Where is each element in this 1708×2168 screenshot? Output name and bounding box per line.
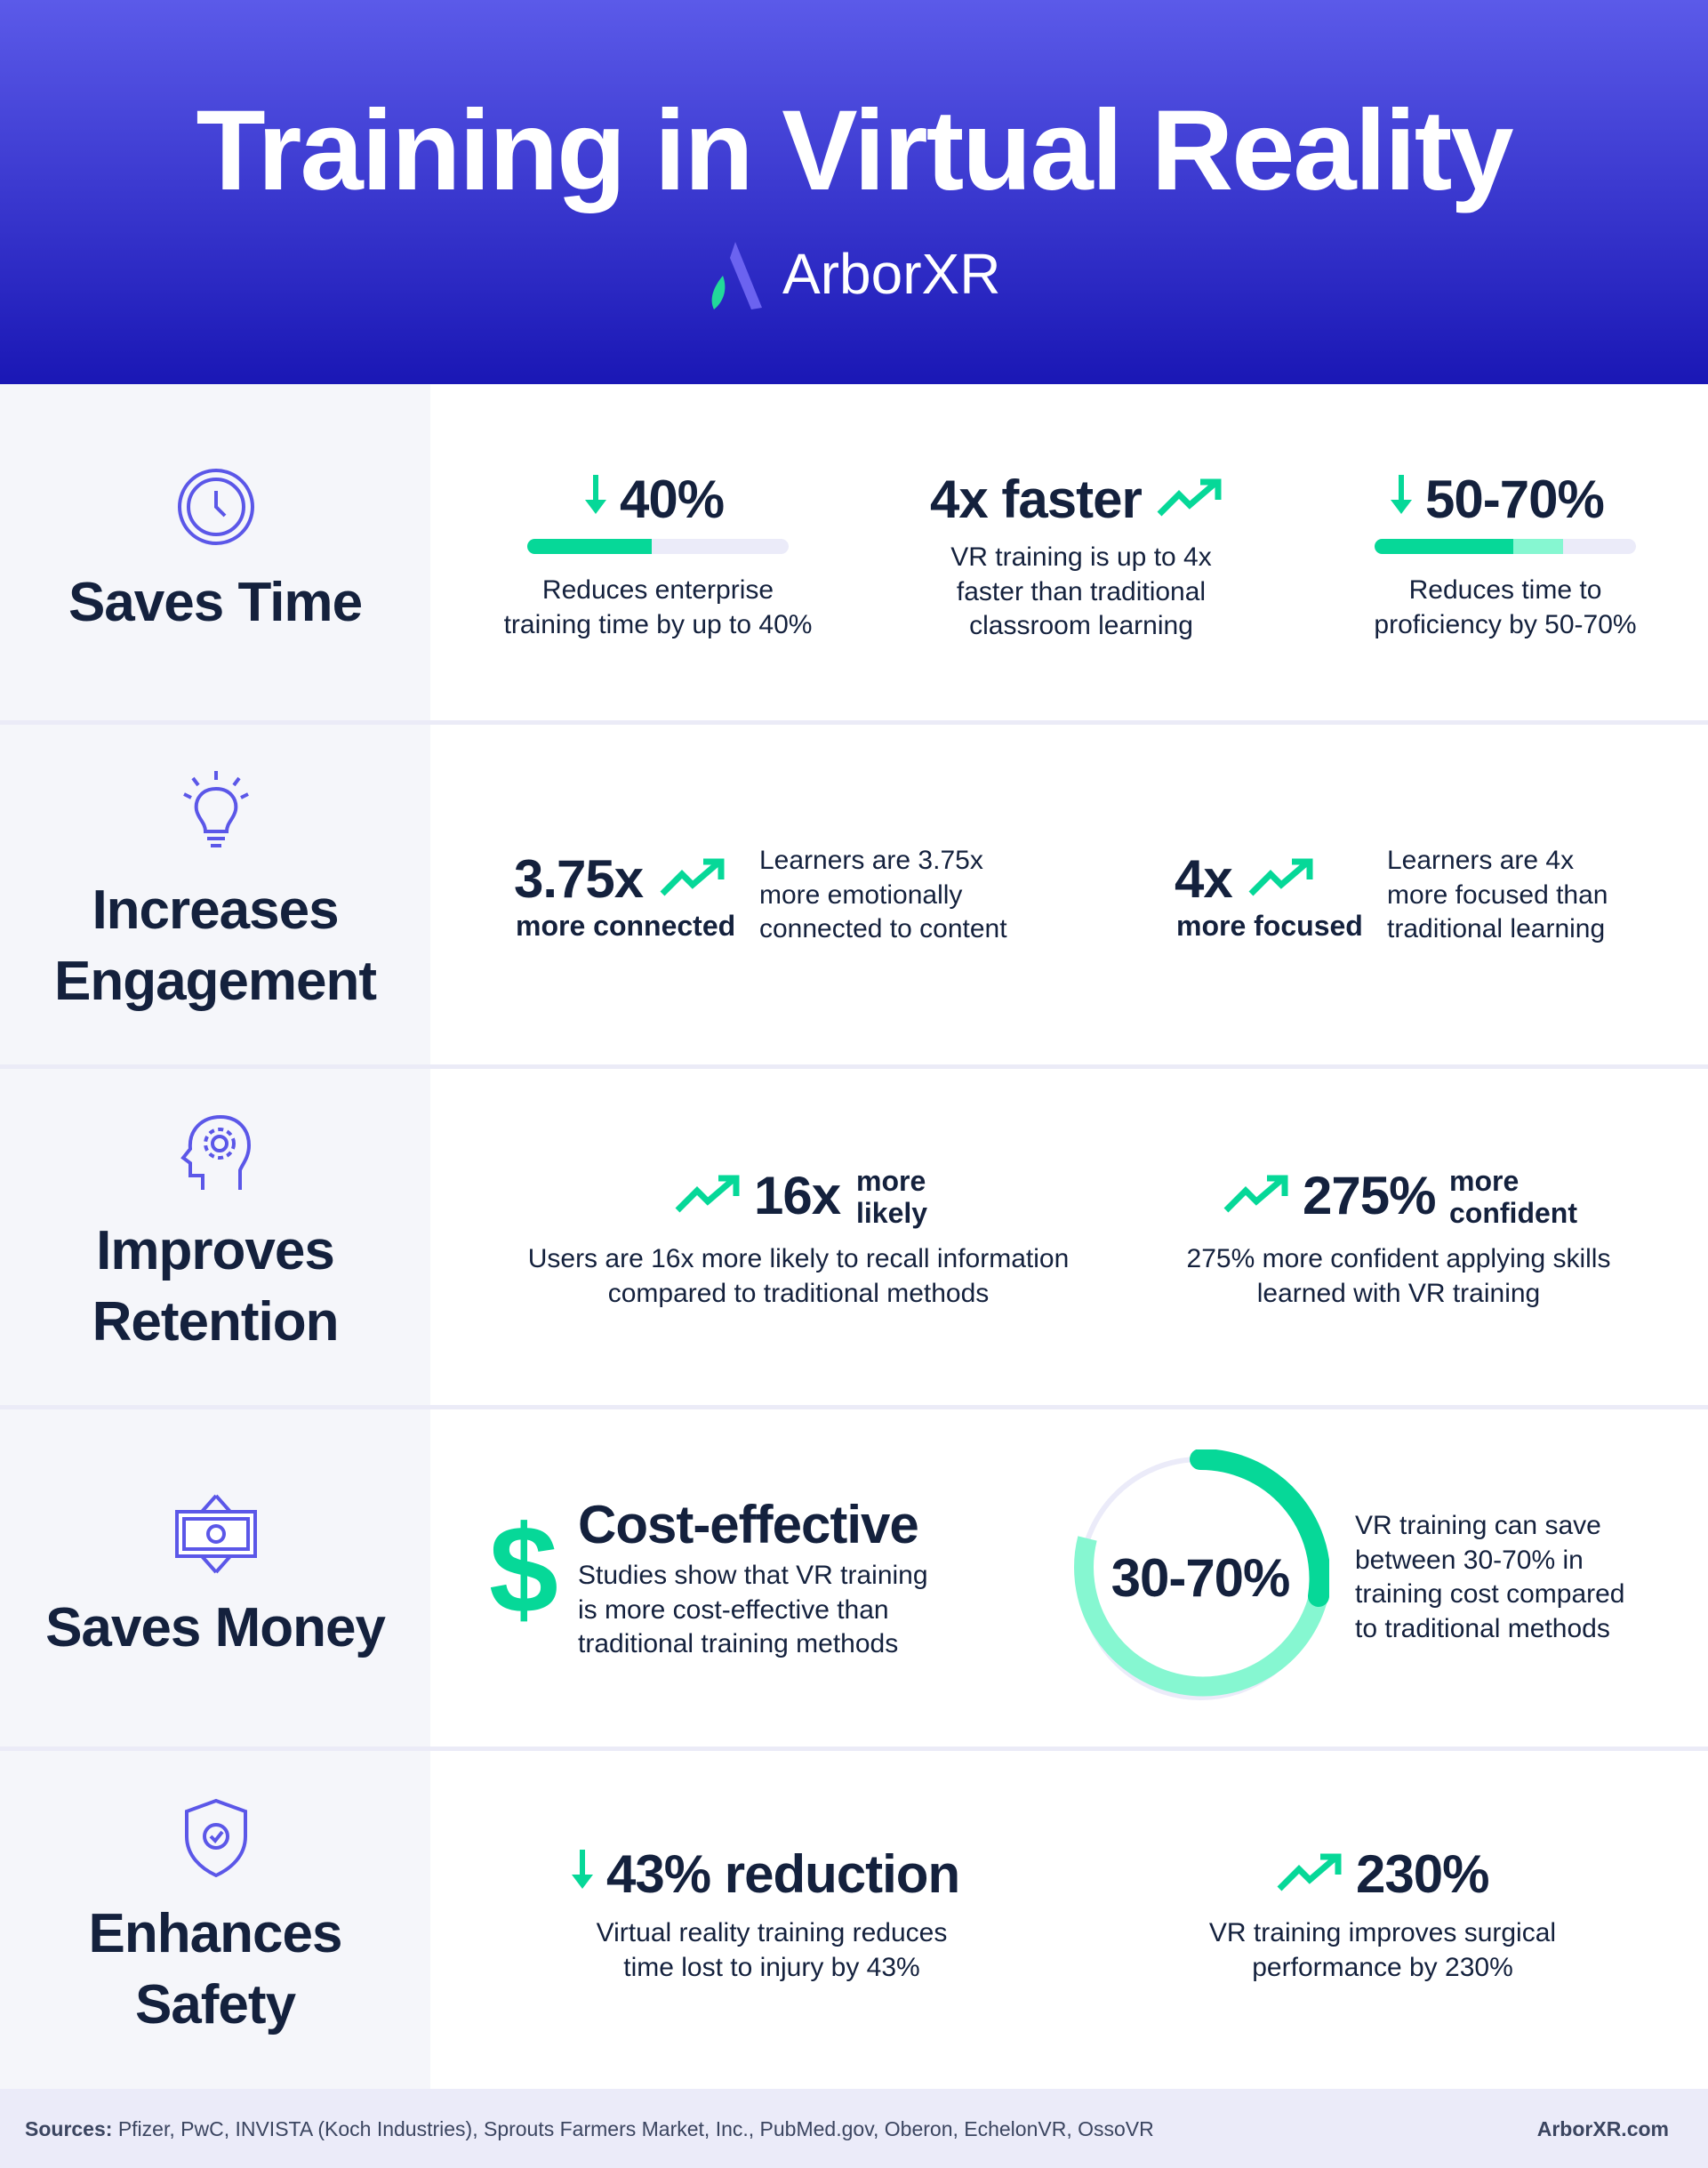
stat: 16x: compared to traditional methods — [608, 1279, 989, 1307]
stat: 3.75x: more emotionally — [759, 880, 962, 909]
stat: 4x — [1175, 846, 1608, 943]
title: Training in Virtual Reality — [196, 87, 1512, 214]
icon: money — [175, 1494, 257, 1574]
stat: 275%: 275% more confident applying skills — [1187, 1244, 1610, 1273]
stat: 4x faster — [930, 470, 1222, 640]
stat: 4x faster: classroom learning — [969, 611, 1193, 640]
stat: 275%: confident — [1449, 1197, 1577, 1229]
row: saves money — [0, 1409, 1708, 1751]
stat: 3.75x: Learners are 3.75x — [759, 846, 983, 875]
stat: 4x faster: VR training is up to 4x — [950, 542, 1212, 572]
stat: 16x — [528, 1165, 1069, 1307]
text: donut description: VR training can save — [1355, 1511, 1601, 1540]
heading: increases engagement: Engagement — [54, 951, 376, 1012]
icon: head with gear — [180, 1115, 251, 1190]
text: donut description: training cost compared — [1355, 1579, 1625, 1609]
heading: saves time: Saves Time — [68, 572, 362, 633]
logo: ArborXR — [782, 242, 1000, 306]
stat: 3.75x: connected to content — [759, 914, 1007, 943]
text: donut description — [1355, 1511, 1625, 1643]
stat: 40%: 40% — [620, 470, 724, 529]
chart: donut 30-70% — [1074, 1449, 1329, 1700]
stat: 16x: Users are 16x more likely to recall information — [528, 1244, 1069, 1273]
stat: 40% — [504, 470, 812, 638]
chart: donut 30-70%: 30-70% — [1111, 1548, 1289, 1608]
stat: 4x: 4x — [1175, 849, 1232, 909]
stat: 40%: Reduces enterprise — [542, 575, 774, 605]
stat: 3.75x: more connected — [516, 910, 735, 942]
row: enhances safety — [0, 1751, 1556, 2089]
site url: ArborXR.com — [1537, 2117, 1669, 2140]
icon: lightbulb — [183, 771, 249, 847]
stat: 40%: training time by up to 40% — [504, 610, 812, 638]
stat: cost-effective: traditional training methods — [578, 1629, 898, 1658]
stat: 230% — [1209, 1844, 1556, 1981]
stat: 230%: performance by 230% — [1252, 1953, 1513, 1981]
footer — [0, 2089, 1708, 2168]
stat: cost-effective — [489, 1495, 928, 1658]
stat: 43% reduction: 43% reduction — [606, 1844, 959, 1904]
stat: 275% — [1187, 1165, 1610, 1307]
row: improves retention — [0, 1069, 1708, 1409]
stat: cost-effective: is more cost-effective than — [578, 1595, 889, 1624]
row: increases engagement — [0, 725, 1708, 1069]
heading: increases engagement: Increases — [92, 879, 339, 941]
icon: shield — [185, 1798, 247, 1877]
heading: improves retention: Improves — [96, 1220, 334, 1281]
stat: 275%: 275% — [1303, 1166, 1435, 1225]
row: saves time — [0, 384, 1708, 725]
text: donut description: between 30-70% in — [1355, 1546, 1584, 1574]
stat: 43% reduction — [572, 1844, 959, 1981]
stat: 4x: more focused — [1176, 910, 1363, 942]
stat: 275%: more — [1449, 1165, 1519, 1197]
icon: clock — [178, 469, 254, 545]
heading: increases engagement — [54, 879, 377, 1012]
stat: 3.75x — [514, 846, 1007, 943]
stat: cost-effective: Studies show that VR training — [578, 1561, 928, 1590]
stat: 43% reduction: time lost to injury by 43% — [623, 1953, 920, 1981]
header — [0, 0, 1708, 384]
stat: 4x faster: faster than traditional — [957, 576, 1206, 606]
stat: 4x: Learners are 4x — [1387, 846, 1574, 875]
stat: 230%: 230% — [1356, 1844, 1488, 1904]
stat: 230%: VR training improves surgical — [1209, 1918, 1556, 1947]
heading: enhances safety — [89, 1903, 341, 2036]
heading: improves retention: Retention — [92, 1291, 338, 1353]
stat: 50-70%: proficiency by 50-70% — [1374, 610, 1637, 638]
stat: 16x: 16x — [754, 1166, 840, 1225]
stat: 16x: likely — [856, 1197, 927, 1229]
stat: 50-70% — [1374, 470, 1637, 638]
stat: 4x faster: 4x faster — [930, 470, 1142, 529]
stat: 3.75x: 3.75x — [514, 849, 643, 909]
heading: improves retention — [92, 1220, 338, 1353]
stat: cost-effective: $ — [489, 1499, 558, 1639]
stat: 4x: traditional learning — [1387, 914, 1605, 943]
stat: 4x: more focused than — [1387, 880, 1608, 909]
stat: 16x: more — [856, 1165, 926, 1197]
heading: enhances safety: Enhances — [89, 1903, 341, 1964]
stat: cost-effective: Cost-effective — [578, 1495, 918, 1554]
stat: 43% reduction: Virtual reality training reduces — [597, 1918, 947, 1947]
heading: saves money: Saves Money — [45, 1597, 385, 1658]
text: donut description: to traditional methods — [1355, 1613, 1610, 1643]
stat: 50-70%: Reduces time to — [1409, 575, 1601, 605]
heading: enhances safety: Safety — [135, 1974, 295, 2036]
stat: 50-70%: 50-70% — [1425, 470, 1604, 529]
sources: Sources: Pfizer, PwC, INVISTA (Koch Industries), Sprouts Farmers Market, Inc., PubMed.gov, Oberon, EchelonVR, OssoVR — [25, 2117, 1154, 2140]
stat: 275%: learned with VR training — [1257, 1279, 1540, 1307]
